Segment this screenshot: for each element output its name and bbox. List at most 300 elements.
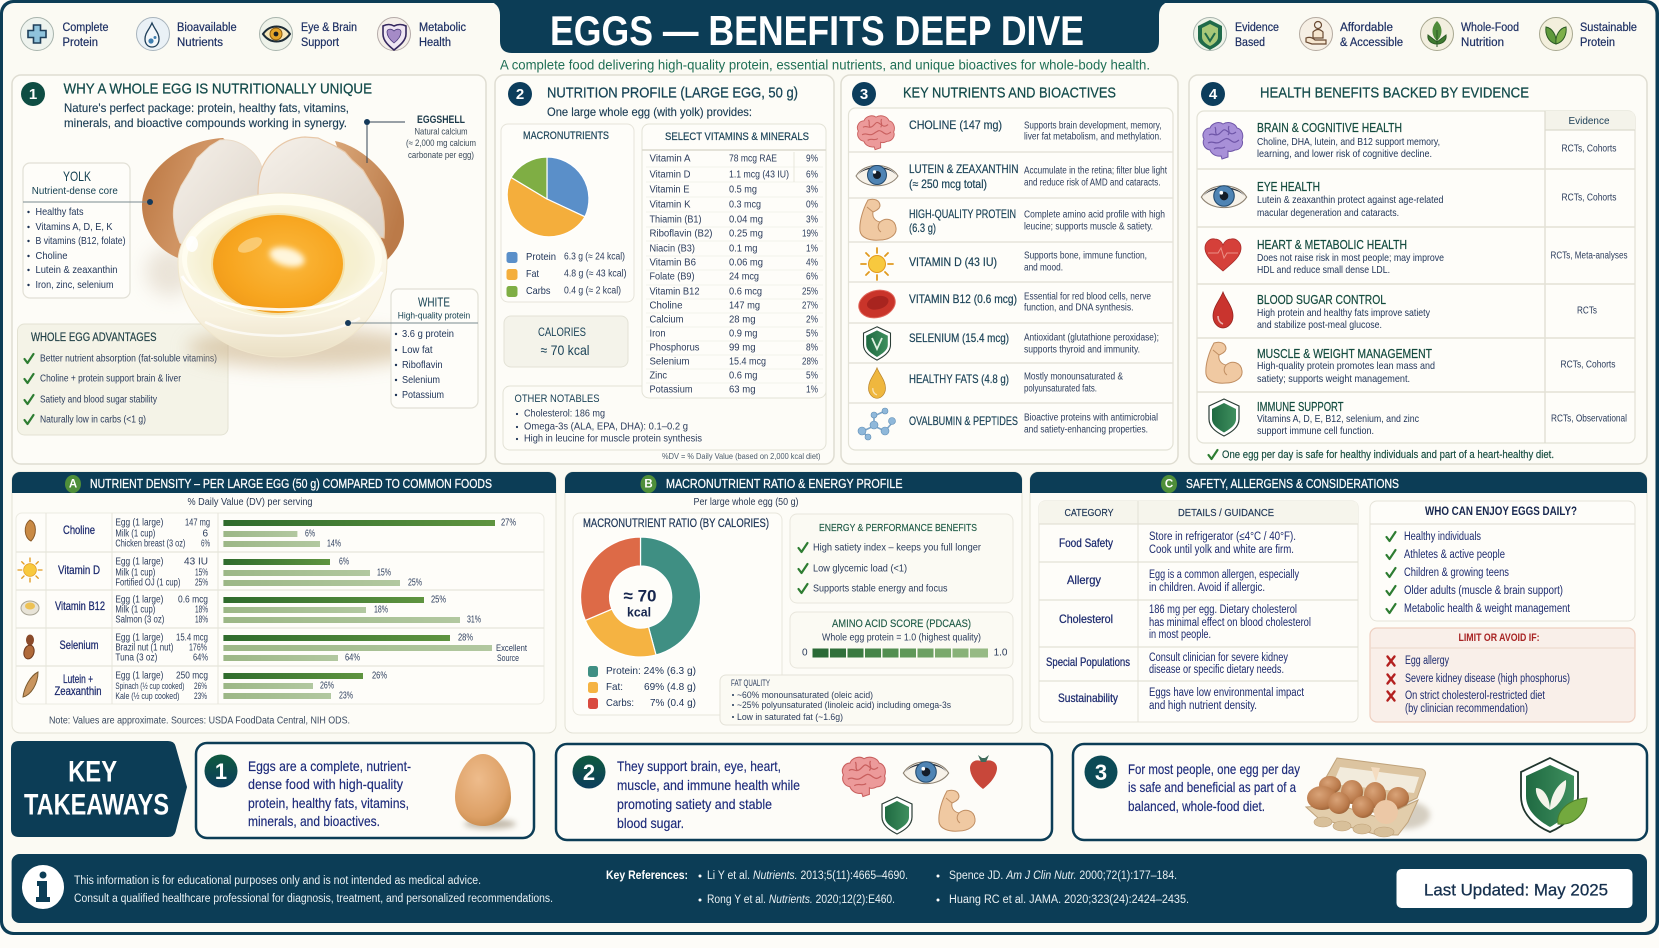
- title banner: EGGS — BENEFITS DEEP DIVE: [550, 7, 1084, 54]
- section A header: NUTRIENT DENSITY – PER LARGE EGG (50 g) COMPARED TO COMMON FOODS: [90, 477, 492, 491]
- row: selenium: Egg (1 large): [115, 632, 163, 644]
- row: selenium: [22, 632, 527, 664]
- row: lutein and zeaxanthin: Kale (½ cup cooked): [115, 691, 179, 701]
- box: fat quality: [720, 675, 1013, 725]
- table: select vitamins and minerals: 5%: [806, 370, 818, 382]
- top left feature icons: [20, 18, 466, 50]
- box: macronutrients: MACRONUTRIENTS: [523, 130, 609, 142]
- feature: sustainable: [1540, 18, 1637, 50]
- box: who can enjoy eggs daily: WHO CAN ENJOY EGGS DAILY?: [1425, 506, 1577, 518]
- section B header: B: [644, 478, 653, 490]
- row: vitamin d: Fortified OJ (1 cup): [115, 578, 180, 588]
- panel 2: nutrition profile: [495, 75, 834, 464]
- row: selenium: Brazil nut (1 nut): [115, 642, 173, 654]
- row: cholesterol: in most people.: [1149, 629, 1211, 641]
- icon: egg carton: [1306, 758, 1430, 837]
- nutrient: high-quality protein: [860, 199, 1165, 240]
- box: energy and performance: Low glycemic load (<1): [813, 564, 907, 574]
- takeaway card 1: [196, 743, 534, 838]
- key takeaways banner: [11, 741, 187, 837]
- donut centre label: [624, 586, 656, 620]
- box: fat quality: ~60% monounsaturated (oleic acid): [737, 690, 873, 700]
- table: select vitamins and minerals: 4%: [806, 258, 818, 268]
- table: select vitamins and minerals: Niacin (B3): [650, 244, 695, 254]
- row: allergy: Allergy: [1067, 573, 1101, 587]
- callout: white: High-quality protein: [398, 310, 470, 322]
- benefit: immune: IMMUNE SUPPORT: [1257, 400, 1344, 414]
- table: select vitamins and minerals: 78 mcg RAE: [729, 154, 777, 164]
- disclaimer: This information is for educational purposes only and is not intended as medical advice.: [74, 875, 481, 887]
- nutrient: choline: liver fat metabolism, and methylation.: [1024, 132, 1162, 142]
- takeaway 2 text: muscle, and immune health while: [617, 777, 800, 793]
- table: select vitamins and minerals: Selenium: [650, 356, 690, 368]
- benefits table: Evidence: [1568, 115, 1610, 127]
- table: select vitamins and minerals: Folate (B9): [650, 272, 694, 282]
- row: special populations: Special Populations: [1046, 655, 1130, 669]
- box: limit or avoid: (by clinician recommendation): [1405, 703, 1528, 715]
- feature: metabolic health: Health: [419, 37, 451, 49]
- legend: 0.4 g (≈ 2 kcal): [564, 286, 621, 296]
- row: vitamin b12: 18%: [195, 614, 208, 626]
- row: vitamin d: 15%: [377, 568, 391, 578]
- callout: yolk: Choline: [36, 250, 68, 262]
- row: vitamin b12: Egg (1 large): [115, 594, 163, 606]
- row: vitamin d: 15%: [195, 568, 208, 578]
- takeaway 1 text: minerals, and bioactives.: [248, 813, 380, 829]
- table: select vitamins and minerals: 0.06 mg: [729, 258, 763, 268]
- row: lutein and zeaxanthin: 250 mcg: [176, 670, 208, 682]
- row: choline: [25, 518, 516, 550]
- row: choline: Choline: [63, 523, 95, 537]
- table: select vitamins and minerals: 0.1 mg: [729, 244, 758, 254]
- table: select vitamins and minerals: 147 mg: [729, 300, 760, 312]
- nutrient: healthy fats: HEALTHY FATS (4.8 g): [909, 372, 1009, 386]
- nutrient: high-quality protein: leucine; supports muscle & satiety.: [1024, 222, 1153, 232]
- benefits table: [1197, 111, 1635, 443]
- callout: yolk: B vitamins (B12, folate): [36, 235, 126, 247]
- feature: affordable: Affordable: [1340, 22, 1393, 34]
- box: energy and performance: ENERGY & PERFORMANCE BENEFITS: [819, 522, 977, 534]
- nutrient: healthy fats: Mostly monounsaturated &: [1024, 372, 1123, 382]
- benefit: blood sugar: High protein and healthy fats improve satiety: [1257, 307, 1431, 319]
- section B subtitle: Per large whole egg (50 g): [694, 496, 798, 508]
- section B header: [565, 472, 1022, 493]
- table: select vitamins and minerals: Iron: [650, 328, 666, 340]
- benefit: eye: RCTs, Cohorts: [1562, 192, 1616, 204]
- benefit: heart: Does not raise risk in most people; may improve: [1257, 252, 1444, 264]
- icon: info: [22, 865, 64, 909]
- icon: shield with leaf: [1521, 758, 1587, 832]
- row: allergy: Egg is a common allergen, especially: [1149, 569, 1299, 581]
- row: choline: 6%: [201, 538, 210, 550]
- section C header: C: [1165, 478, 1173, 490]
- nutrient: vitamin d: Supports bone, immune function,: [1024, 250, 1147, 262]
- table: select vitamins and minerals: 1%: [806, 244, 818, 254]
- chart subtitle: % Daily Value (DV) per serving: [188, 496, 313, 508]
- table: select vitamins and minerals: 28%: [802, 356, 818, 368]
- number badge 1: [21, 82, 45, 106]
- takeaway 1 text: [248, 758, 411, 829]
- nutrient: ovalbumin and peptides: and satiety-enhancing properties.: [1024, 424, 1148, 436]
- box: macronutrient ratio: MACRONUTRIENT RATIO (BY CALORIES): [583, 518, 769, 530]
- key references: [606, 870, 1189, 906]
- panel 1: why a whole egg is unique: [12, 75, 486, 464]
- panel 1 intro: minerals, and bioactive compounds working in synergy.: [64, 116, 347, 130]
- row: sustainability: and high nutrient density.: [1149, 700, 1257, 712]
- section B: macronutrient ratio: [565, 472, 1022, 733]
- table: select vitamins and minerals: 24 mcg: [729, 272, 759, 282]
- table: select vitamins and minerals: Phosphorus: [650, 342, 700, 354]
- box: macronutrients: [501, 124, 634, 302]
- box: calories: CALORIES: [538, 325, 586, 339]
- nutrient: choline: CHOLINE (147 mg): [909, 118, 1002, 132]
- nutrient: choline: Supports brain development, memory,: [1024, 120, 1162, 132]
- benefit: eye: Lutein & zeaxanthin protect against age-related: [1257, 194, 1444, 206]
- benefit: heart: [1205, 238, 1628, 276]
- icon: whole egg: [455, 754, 516, 829]
- callout: yolk: Healthy fats: [36, 206, 84, 218]
- row: sustainability: Eggs have low environmental impact: [1149, 687, 1305, 699]
- number badge 2: 2: [516, 86, 524, 103]
- table: select vitamins and minerals: 8%: [806, 342, 818, 354]
- callout: white: Low fat: [402, 344, 433, 356]
- row: selenium: 64%: [193, 652, 208, 664]
- box: energy and performance: High satiety index – keeps you full longer: [813, 542, 982, 554]
- row: vitamin d: Vitamin D: [58, 563, 100, 577]
- box: limit or avoid: [1370, 628, 1635, 722]
- box: other notables: High in leucine for muscle protein synthesis: [524, 434, 702, 444]
- key takeaways banner: KEY: [68, 756, 117, 788]
- row: lutein and zeaxanthin: Spinach (½ cup cooked): [115, 681, 184, 691]
- feature: complete protein: [20, 18, 108, 50]
- table: select vitamins and minerals: Zinc: [650, 370, 667, 382]
- box: who can enjoy eggs daily: Children & growing teens: [1404, 567, 1509, 579]
- number badge 4: 4: [1209, 86, 1218, 103]
- row: choline: 6%: [305, 528, 315, 540]
- row: vitamin d: [18, 556, 422, 588]
- box: limit or avoid: Egg allergy: [1405, 655, 1449, 667]
- row: vitamin b12: Salmon (3 oz): [115, 614, 164, 626]
- key references: Huang RC et al. JAMA. 2020;323(24):2424–2435.: [949, 894, 1189, 906]
- callout: eggshell: (≈ 2,000 mg calcium: [406, 138, 476, 148]
- table: select vitamins and minerals: Potassium: [650, 384, 692, 396]
- row: vitamin b12: 18%: [374, 604, 388, 616]
- takeaway 3 text: For most people, one egg per day: [1128, 761, 1300, 777]
- nutrient: vitamin b12: [856, 286, 1151, 322]
- row: vitamin d: 43 IU: [184, 556, 208, 568]
- takeaway card 3: [1073, 744, 1647, 840]
- legend: Protein: [526, 251, 556, 263]
- row: lutein and zeaxanthin: 26%: [372, 670, 387, 682]
- callout: white: Riboflavin: [402, 359, 443, 371]
- row: vitamin d: 25%: [408, 578, 422, 588]
- nutrient: healthy fats: [868, 368, 1123, 398]
- box: who can enjoy eggs daily: [1370, 501, 1635, 621]
- callout: eggshell: [364, 114, 476, 163]
- row: choline: 27%: [501, 518, 516, 528]
- box: limit or avoid: On strict cholesterol-restricted diet: [1405, 690, 1546, 702]
- benefit: blood sugar: RCTs: [1577, 306, 1597, 316]
- number badge: [204, 754, 238, 788]
- table: select vitamins and minerals: 0.5 mg: [729, 184, 757, 196]
- illustration: cracked egg: [142, 137, 423, 368]
- row: allergy: [1067, 569, 1299, 594]
- row: selenium: Selenium: [60, 638, 98, 652]
- box: amino acid score: Whole egg protein = 1.0 (highest quality): [822, 632, 981, 644]
- feature: eye and brain: Eye & Brain: [301, 22, 357, 34]
- table: select vitamins and minerals: Riboflavin (B2): [650, 228, 712, 240]
- row: vitamin b12: 18%: [195, 604, 208, 616]
- row: lutein and zeaxanthin: 23%: [339, 690, 353, 702]
- benefit: immune: RCTs, Observational: [1551, 414, 1627, 424]
- table: select vitamins and minerals: Vitamin K: [650, 200, 691, 210]
- nutrient: lutein and zeaxanthin: and reduce risk of AMD and cataracts.: [1024, 178, 1160, 188]
- row: vitamin b12: 0.6 mcg: [178, 594, 208, 606]
- benefit: muscle: satiety; supports weight management.: [1257, 373, 1410, 385]
- takeaway 3 text: is safe and beneficial as part of a: [1128, 779, 1296, 795]
- box: limit or avoid: LIMIT OR AVOID IF:: [1458, 632, 1540, 644]
- key references: Spence JD. Am J Clin Nutr. 2000;72(1):177–184.: [949, 870, 1177, 882]
- box: amino acid score: AMINO ACID SCORE (PDCAAS): [832, 618, 971, 630]
- benefit: muscle: RCTs, Cohorts: [1560, 360, 1616, 370]
- sources note: Note: Values are approximate. Sources: USDA FoodData Central, NIH ODS.: [49, 716, 350, 726]
- callout: white: 3.6 g protein: [402, 328, 454, 340]
- feature: metabolic health: [378, 18, 466, 50]
- row: vitamin d: Milk (1 cup): [115, 568, 155, 578]
- table: select vitamins and minerals: 6%: [806, 170, 818, 180]
- benefit: brain: RCTs, Cohorts: [1562, 144, 1616, 154]
- table: select vitamins and minerals: 1%: [806, 384, 818, 396]
- table: select vitamins and minerals: 3%: [806, 184, 818, 196]
- disclaimer: Consult a qualified healthcare professional for diagnosis, treatment, and personalized recommendations.: [74, 893, 553, 905]
- benefit: blood sugar: BLOOD SUGAR CONTROL: [1257, 293, 1386, 307]
- footnote: percent daily value: %DV = % Daily Value (based on 2,000 kcal diet): [662, 451, 821, 461]
- benefit: muscle: MUSCLE & WEIGHT MANAGEMENT: [1257, 347, 1432, 361]
- panel 2 heading: NUTRITION PROFILE (LARGE EGG, 50 g): [547, 84, 798, 102]
- nutrient: healthy fats: polyunsaturated fats.: [1024, 384, 1097, 394]
- box: whole egg advantages: Naturally low in carbs (<1 g): [40, 414, 146, 426]
- number badge 1: 1: [29, 86, 37, 103]
- row: vitamin b12: Vitamin B12: [55, 599, 105, 613]
- number badge 4: [1201, 82, 1225, 106]
- nutrient: vitamin d: [861, 248, 1147, 280]
- row: choline: Chicken breast (3 oz): [115, 538, 185, 550]
- row: lutein and zeaxanthin: 26%: [320, 680, 334, 692]
- row: choline: Milk (1 cup): [115, 528, 155, 540]
- feature: affordable: & Accessible: [1340, 37, 1403, 49]
- row: special populations: disease or specific dietary needs.: [1149, 664, 1284, 676]
- box: fat quality: Low in saturated fat (~1.6g): [737, 712, 843, 722]
- section A header: [12, 472, 556, 493]
- icons: organs: [842, 755, 997, 834]
- takeaway 1 text: protein, healthy fats, vitamins,: [248, 795, 409, 811]
- table: select vitamins and minerals: Vitamin B6: [650, 258, 696, 268]
- table: select vitamins and minerals: 2%: [806, 314, 818, 326]
- table: select vitamins and minerals: Thiamin (B1): [650, 214, 702, 226]
- panel 1 intro: [64, 101, 349, 130]
- table: select vitamins and minerals: 1.1 mcg (43 IU): [729, 170, 789, 180]
- last updated badge: Last Updated: May 2025: [1424, 880, 1608, 900]
- guidance table: DETAILS / GUIDANCE: [1178, 507, 1274, 519]
- callout: yolk: Lutein & zeaxanthin: [36, 264, 118, 276]
- pie chart: [507, 157, 589, 237]
- donut centre label: kcal: [627, 604, 651, 620]
- row: lutein and zeaxanthin: Egg (1 large): [115, 670, 163, 682]
- row: choline: 14%: [327, 538, 341, 550]
- box: amino acid score: [790, 612, 1013, 668]
- row: sustainability: [1058, 687, 1305, 712]
- nutrient: high-quality protein: HIGH-QUALITY PROTEIN: [909, 207, 1016, 221]
- nutrient: lutein and zeaxanthin: (≈ 250 mcg total): [909, 177, 987, 191]
- table: select vitamins and minerals: 0.3 mcg: [729, 200, 761, 210]
- nutrient: ovalbumin and peptides: [858, 408, 1158, 440]
- callout: eggshell: carbonate per egg): [408, 150, 474, 160]
- footer bar: [12, 854, 1647, 923]
- table: select vitamins and minerals: 0.25 mg: [729, 228, 763, 240]
- callout: yolk: Iron, zinc, selenium: [36, 279, 114, 291]
- table: select vitamins and minerals: 9%: [806, 154, 818, 164]
- benefit: brain: [1203, 121, 1616, 160]
- takeaway 3 text: balanced, whole-food diet.: [1128, 798, 1265, 814]
- row: selenium: 64%: [345, 652, 360, 664]
- nutrient: ovalbumin and peptides: Bioactive proteins with antimicrobial: [1024, 412, 1158, 424]
- table: select vitamins and minerals: Vitamin E: [650, 184, 690, 196]
- callout: yolk: Vitamins A, D, E, K: [36, 221, 112, 233]
- score scale: [812, 648, 988, 658]
- section B header: MACRONUTRIENT RATIO & ENERGY PROFILE: [666, 477, 902, 491]
- donut legend: Fat:: [606, 681, 623, 693]
- nutrient: vitamin b12: Essential for red blood cells, nerve: [1024, 292, 1151, 302]
- row: lutein and zeaxanthin: 26%: [194, 681, 207, 691]
- row: choline: 6: [202, 528, 208, 540]
- nutrient list: [848, 108, 1173, 450]
- benefit: eye: EYE HEALTH: [1257, 180, 1320, 194]
- row: vitamin b12: 31%: [467, 614, 481, 626]
- donut legend: Protein: 24% (6.3 g): [606, 665, 696, 677]
- nutrient: choline: [857, 116, 1162, 150]
- table: select vitamins and minerals: 25%: [802, 286, 818, 298]
- row: vitamin b12: Milk (1 cup): [115, 604, 155, 616]
- takeaway 2 text: They support brain, eye, heart,: [617, 758, 781, 774]
- row: selenium: Excellent: [496, 643, 527, 653]
- benefit: heart: HDL and reduce small dense LDL.: [1257, 264, 1390, 276]
- row: choline: Egg (1 large): [115, 518, 163, 528]
- callout: eggshell: Natural calcium: [414, 126, 468, 138]
- panel 2 intro: One large whole egg (with yolk) provides:: [547, 105, 752, 119]
- box: calories: ≈ 70 kcal: [540, 342, 590, 358]
- row: selenium: Source: [497, 653, 519, 663]
- benefit: immune: Vitamins A, D, E, B12, selenium, and zinc: [1257, 413, 1419, 425]
- row: selenium: 15.4 mcg: [176, 632, 208, 644]
- feature: complete protein: Complete: [62, 22, 108, 34]
- row: cholesterol: Cholesterol: [1059, 612, 1113, 626]
- feature: eye and brain: [260, 18, 357, 50]
- box: amino acid score: 1.0: [994, 648, 1008, 658]
- row: food safety: Food Safety: [1059, 536, 1113, 550]
- nutrient: selenium: Antioxidant (glutathione peroxidase);: [1024, 332, 1159, 344]
- table: select vitamins and minerals: 28 mg: [729, 314, 756, 326]
- panel 3: key nutrients and bioactives: [841, 75, 1178, 464]
- callout: yolk: [23, 163, 153, 298]
- nutrient: lutein and zeaxanthin: Accumulate in the retina; filter blue light: [1024, 166, 1167, 176]
- callout: yolk: Nutrient-dense core: [32, 185, 118, 197]
- row: lutein and zeaxanthin: Zeaxanthin: [54, 684, 102, 698]
- key references: Key References:: [606, 870, 688, 882]
- callout: white: Potassium: [402, 389, 444, 401]
- box: calories: [504, 316, 628, 367]
- nutrient: high-quality protein: (6.3 g): [909, 221, 936, 235]
- row: food safety: [1059, 531, 1296, 556]
- feature: sustainable: Protein: [1580, 37, 1615, 49]
- number badge: [1084, 756, 1118, 788]
- section A: nutrient density: [12, 472, 556, 733]
- number badge 3: 3: [860, 86, 868, 103]
- row: vitamin d: 6%: [339, 556, 349, 568]
- table: select vitamins and minerals: 0.6 mcg: [729, 286, 762, 298]
- donut chart: [581, 537, 701, 657]
- feature: whole-food: Whole-Food: [1461, 22, 1519, 34]
- row: special populations: Consult clinician for severe kidney: [1149, 652, 1288, 664]
- panel 1 heading: WHY A WHOLE EGG IS NUTRITIONALLY UNIQUE: [64, 80, 372, 98]
- panel 4: health benefits: [1189, 75, 1647, 464]
- callout: eggshell: EGGSHELL: [417, 114, 465, 126]
- row: vitamin d: Egg (1 large): [115, 556, 163, 568]
- table: select vitamins and minerals: 0.04 mg: [729, 214, 763, 226]
- donut legend: Carbs:: [606, 697, 634, 709]
- box: whole egg advantages: Satiety and blood sugar stability: [40, 394, 157, 406]
- box: whole egg advantages: WHOLE EGG ADVANTAGES: [31, 332, 157, 344]
- benefit: eye: [1201, 180, 1616, 219]
- guidance table: CATEGORY: [1064, 507, 1114, 519]
- bar chart table: [16, 513, 544, 704]
- benefit: muscle: [1206, 342, 1616, 385]
- row: food safety: Cook until yolk and white are firm.: [1149, 544, 1294, 556]
- section A header: A: [69, 478, 77, 490]
- benefit: brain: BRAIN & COGNITIVE HEALTH: [1257, 121, 1402, 135]
- row: lutein and zeaxanthin: [23, 670, 387, 702]
- feature: metabolic health: Metabolic: [419, 22, 466, 34]
- box: other notables: Omega-3s (ALA, EPA, DHA): 0.1–0.2 g: [524, 422, 688, 432]
- nutrient: ovalbumin and peptides: OVALBUMIN & PEPTIDES: [909, 414, 1018, 428]
- safety note: One egg per day is safe for healthy individuals and part of a heart-healthy diet.: [1222, 449, 1554, 461]
- box: other notables: [503, 386, 826, 450]
- table: select vitamins and minerals: Vitamin D: [650, 170, 690, 180]
- feature: evidence based: Based: [1235, 37, 1265, 49]
- takeaway 2 text: [617, 758, 800, 831]
- legend: [506, 251, 626, 297]
- box: fat quality: ~25% polyunsaturated (linoleic acid) including omega-3s: [737, 700, 951, 710]
- disclaimer: [74, 875, 553, 905]
- table: select vitamins and minerals: SELECT VITAMINS & MINERALS: [665, 131, 809, 143]
- feature: affordable: [1300, 18, 1403, 50]
- nutrient: high-quality protein: Complete amino acid profile with high: [1024, 210, 1165, 220]
- row: cholesterol: [1059, 604, 1311, 641]
- table: select vitamins and minerals: 0%: [806, 200, 818, 210]
- panel 4 heading: HEALTH BENEFITS BACKED BY EVIDENCE: [1260, 84, 1529, 102]
- feature: sustainable: Sustainable: [1580, 22, 1637, 34]
- section C header: SAFETY, ALLERGENS & CONSIDERATIONS: [1186, 477, 1399, 491]
- key references: Rong Y et al. Nutrients. 2020;12(2):E460.: [707, 894, 895, 906]
- box: energy and performance: [790, 514, 1013, 603]
- number badge: 3: [1095, 760, 1107, 785]
- nutrient: selenium: [864, 327, 1159, 360]
- donut legend: 69% (4.8 g): [644, 681, 696, 693]
- takeaway 2 text: blood sugar.: [617, 815, 684, 831]
- number badge 3: [852, 82, 876, 106]
- callout: white: WHITE: [418, 294, 450, 310]
- feature: bioavailable nutrients: Bioavailable: [177, 22, 237, 34]
- box: who can enjoy eggs daily: Athletes & active people: [1404, 549, 1505, 561]
